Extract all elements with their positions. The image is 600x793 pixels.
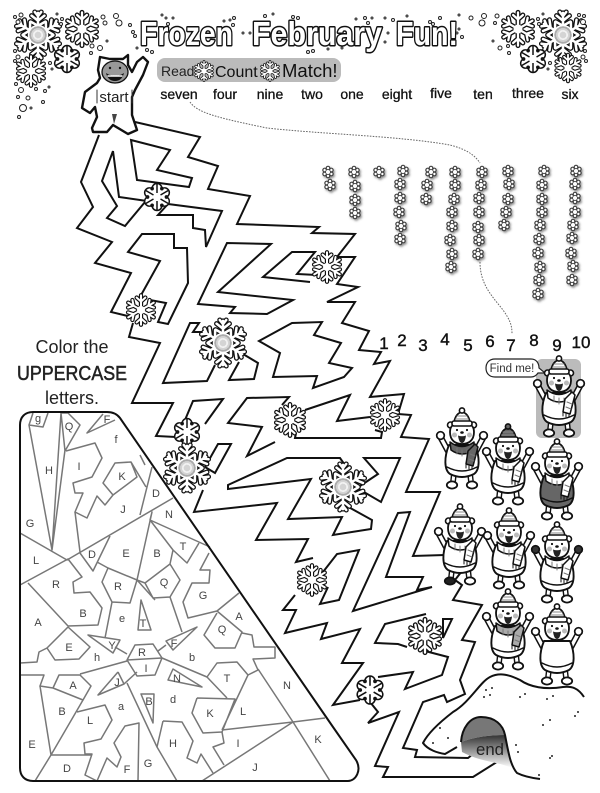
- number words: ten: [473, 86, 493, 102]
- letters: e: [119, 613, 125, 625]
- title: February: [252, 15, 383, 52]
- banner: read count match: Match!: [282, 60, 338, 81]
- letters: d: [170, 694, 176, 706]
- counting snowflake columns: [321, 165, 583, 300]
- letters: H: [45, 465, 53, 477]
- panel: color by letter triangle: [20, 412, 358, 781]
- numbers 1 to 10: 7: [506, 336, 516, 355]
- number words: four: [213, 86, 237, 102]
- number words: seven: [160, 86, 198, 102]
- numbers 1 to 10: [379, 330, 590, 355]
- number words: three: [512, 85, 544, 101]
- instruction: color the uppercase letters: letters.: [45, 388, 99, 408]
- corner snowflakes right: [501, 12, 587, 81]
- letters: Y: [108, 640, 116, 652]
- instruction: color the uppercase letters: [17, 337, 127, 408]
- numbers 1 to 10: 3: [418, 336, 428, 355]
- letters: [26, 413, 322, 776]
- numbers 1 to 10: 2: [397, 331, 407, 350]
- letters: Q: [160, 577, 169, 589]
- letters: J: [120, 504, 126, 516]
- number words: one: [340, 86, 364, 102]
- letters: a: [118, 701, 125, 713]
- letters: L: [33, 555, 39, 567]
- letters: H: [169, 738, 177, 750]
- letters: Q: [65, 421, 74, 433]
- speech bubble: find me: Find me!: [490, 363, 534, 375]
- letters: J: [252, 762, 258, 774]
- letters: F: [171, 638, 178, 650]
- numbers 1 to 10: 9: [552, 336, 562, 355]
- letters: G: [199, 590, 207, 602]
- letters: T: [180, 541, 187, 553]
- dotted example line: snowflakes to number: [480, 262, 512, 334]
- number words: eight: [382, 86, 412, 102]
- decorative snow dots: [14, 13, 588, 118]
- speech bubble: find me: [486, 359, 545, 377]
- letters: B: [153, 548, 161, 560]
- letters: D: [88, 549, 96, 561]
- letters: I: [77, 461, 81, 473]
- letters: T: [140, 618, 147, 630]
- banner: read count match: Count: [215, 64, 258, 81]
- letters: T: [224, 673, 231, 685]
- yeti at start: start: [99, 89, 129, 106]
- letters: B: [79, 608, 87, 620]
- number words: two: [301, 86, 323, 102]
- letters: N: [173, 673, 181, 685]
- letters: g: [35, 413, 41, 425]
- letters: f: [114, 434, 118, 446]
- number words: [160, 85, 579, 102]
- letters: G: [26, 518, 34, 530]
- corner snowflakes left: [14, 12, 99, 86]
- letters: L: [240, 706, 246, 718]
- letters: K: [314, 734, 322, 746]
- letters: D: [152, 488, 160, 500]
- banner: read count match: Read: [161, 63, 194, 79]
- maze walls: [77, 122, 500, 777]
- letters: b: [189, 652, 195, 664]
- numbers 1 to 10: 8: [529, 331, 539, 350]
- letters: K: [206, 708, 214, 720]
- letters: J: [114, 677, 120, 689]
- title: Fun!: [396, 15, 458, 52]
- dotted example line: word to snowflakes: [190, 102, 480, 163]
- letters: A: [69, 680, 77, 692]
- highlighted find me box: [536, 359, 581, 438]
- letters: F: [124, 764, 131, 776]
- letters: B: [145, 696, 153, 708]
- bears: [435, 356, 584, 685]
- cave at end of maze: end: [476, 740, 504, 759]
- banner: read count match: [157, 58, 341, 82]
- letters: N: [165, 509, 173, 521]
- letters: B: [58, 706, 66, 718]
- numbers 1 to 10: 5: [463, 336, 473, 355]
- letters: E: [122, 548, 130, 560]
- letters: L: [87, 715, 93, 727]
- letters: N: [283, 680, 291, 692]
- letters: F: [104, 414, 111, 426]
- letters: I: [144, 663, 148, 675]
- letters: E: [65, 642, 73, 654]
- numbers 1 to 10: 10: [572, 333, 590, 352]
- maze snowflakes: [126, 184, 442, 704]
- numbers 1 to 10: 6: [485, 332, 495, 351]
- letters: A: [235, 611, 243, 623]
- number words: nine: [257, 86, 283, 102]
- letters: E: [28, 739, 36, 751]
- letters: A: [34, 617, 42, 629]
- title: [140, 15, 458, 52]
- instruction: color the uppercase letters: Color the: [35, 337, 109, 357]
- numbers 1 to 10: 1: [379, 334, 389, 353]
- cave at end of maze: [423, 674, 584, 780]
- letters: I: [236, 738, 240, 750]
- letters: K: [118, 471, 126, 483]
- letters: R: [114, 581, 122, 593]
- letters: Q: [218, 624, 227, 636]
- instruction: color the uppercase letters: UPPERCASE: [17, 363, 127, 385]
- letters: D: [63, 763, 71, 775]
- number words: five: [430, 85, 452, 101]
- title: Frozen: [140, 15, 233, 52]
- number words: six: [561, 86, 579, 102]
- yeti at start: [82, 55, 148, 134]
- letters: G: [144, 758, 152, 770]
- numbers 1 to 10: 4: [440, 330, 450, 349]
- letters: R: [52, 579, 60, 591]
- letters: h: [94, 652, 100, 664]
- letters: R: [138, 647, 146, 659]
